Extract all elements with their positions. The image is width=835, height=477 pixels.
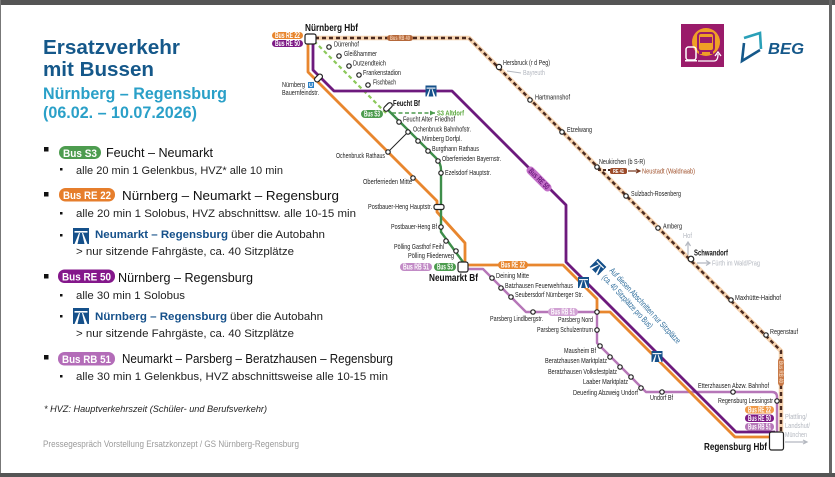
station labels: Postbauer-Heng Bf bbox=[391, 222, 438, 231]
pill: RB 51 Regensburg bbox=[745, 422, 774, 431]
station labels: Ezelsdorf Hauptstr. bbox=[445, 168, 491, 177]
station labels: Undorf Bf bbox=[650, 393, 674, 402]
icon: motorway rotated bbox=[590, 259, 606, 275]
pill: RE 22 Regensburg bbox=[745, 405, 774, 414]
station: Nürnberg Hbf bbox=[305, 23, 359, 44]
pill: RB 51 Neumarkt: Bus RB 51 bbox=[403, 262, 429, 272]
pill: RB 51 Parsberg: Bus RB 51 bbox=[551, 308, 575, 316]
station labels: Maxhütte-Haidhof bbox=[735, 293, 782, 302]
list item: Bus RB 51: alle 30 min 1 Gelenkbus, HVZ abschnittsweise alle 10-15 min bbox=[76, 371, 388, 383]
station labels: Neukirchen (b S-R) bbox=[599, 157, 645, 166]
station labels: Beratzhausen Volksfestplatz bbox=[548, 367, 617, 376]
connections: grey destinations: Fürth im Wald/Prag bbox=[712, 258, 760, 268]
line: RE 22 bbox=[308, 44, 775, 437]
list item: Bus RE 50 bbox=[44, 270, 323, 340]
pill: RB 40 vertical bbox=[777, 358, 784, 386]
line: RB 40 dashed bbox=[315, 38, 781, 436]
icon: U-Bahn: U bbox=[309, 83, 313, 89]
list item: Bus RE 22: Bus RE 22 bbox=[63, 190, 111, 202]
list item: Bus RE 22: über die Autobahn bbox=[231, 229, 325, 241]
station labels: Fischbach bbox=[373, 78, 396, 86]
pill: S3 Feucht bbox=[361, 110, 383, 118]
callout: motorway seating note: (ca. 40 Sitzplätze pro Bus) bbox=[600, 272, 655, 330]
title: Ersatzverkehr bbox=[43, 37, 180, 59]
line: RB 51 bbox=[468, 269, 777, 435]
station labels: Oberferrieden Mitte bbox=[363, 177, 412, 186]
pill: S3 Feucht: Bus S3 bbox=[364, 110, 380, 118]
list item: Bus S3 bbox=[44, 146, 283, 177]
icon: bus replacement bbox=[681, 24, 724, 67]
station labels: Amberg bbox=[663, 222, 682, 230]
pill: RE 22 Regensburg: Bus RE 22 bbox=[748, 405, 771, 414]
pill: RB 51 Parsberg bbox=[548, 308, 578, 316]
station labels: Pölling Gasthof Feihl bbox=[394, 242, 444, 251]
list item: Bus RE 22 bbox=[44, 188, 356, 258]
stations: nodes bbox=[314, 45, 779, 403]
icon: motorway bbox=[73, 228, 89, 244]
station labels: Parsberg Nord bbox=[558, 315, 593, 324]
station labels: Dürrenhof bbox=[334, 40, 360, 48]
station labels: Feucht Alter Friedhof bbox=[403, 114, 456, 124]
connection: S3 Altdorf bbox=[430, 110, 465, 118]
pill: RB 51 Regensburg: Bus RB 51 bbox=[748, 422, 771, 431]
icon: motorway Undorf bbox=[652, 351, 662, 362]
pill: RE 22 east of Neumarkt bbox=[498, 260, 528, 270]
route map bbox=[272, 23, 811, 453]
pill: RE 50 Nürnberg: Bus RE 50 bbox=[275, 39, 300, 48]
station: Feucht Bf: Feucht Bf bbox=[393, 99, 420, 108]
station: Neumarkt Bf bbox=[429, 262, 478, 284]
station labels: Ochenbruck Bahnhofstr. bbox=[413, 124, 471, 134]
title bbox=[43, 37, 227, 122]
connections: grey destinations: Plattling/ bbox=[785, 412, 808, 421]
station: Regensburg Hbf: Regensburg Hbf bbox=[704, 441, 767, 453]
station labels: Gleißhammer bbox=[344, 49, 377, 58]
logo: BEG bbox=[742, 33, 804, 61]
station labels: Hartmannshof bbox=[535, 92, 571, 102]
pill: RB 40 top bbox=[387, 35, 413, 42]
station labels: Ochenbruck Rathaus bbox=[336, 151, 385, 160]
connections: grey destinations: Landshut/ bbox=[785, 421, 811, 430]
line: S3 bbox=[388, 110, 463, 262]
station labels: Regensburg Lessingstr bbox=[718, 396, 773, 405]
pill: RE 50 Regensburg bbox=[745, 414, 774, 423]
title: Nürnberg – Regensburg bbox=[43, 85, 227, 103]
connector: Ochenbruck bbox=[388, 132, 408, 152]
station labels: Sulzbach-Rosenberg bbox=[631, 189, 681, 198]
station: Regensburg Hbf bbox=[704, 432, 784, 453]
station: Schwandorf: Schwandorf bbox=[694, 248, 728, 258]
pill: RE 22 Nürnberg bbox=[272, 31, 303, 40]
line: RE 50 bbox=[313, 44, 775, 432]
pill: RB 40 vertical: Bus RB 40 bbox=[777, 361, 783, 383]
list item: Bus RB 51: Neumarkt – Parsberg – Beratzhausen – Regensburg bbox=[122, 352, 393, 366]
connection: S3 Altdorf: S3 Altdorf bbox=[437, 110, 465, 118]
list item: Bus RE 22: alle 20 min 1 Solobus, HVZ abschnittsw. alle 10-15 min bbox=[76, 208, 356, 220]
station: Neumarkt Bf: Neumarkt Bf bbox=[429, 272, 478, 284]
list item: Bus S3: alle 20 min 1 Gelenkbus, HVZ* alle 10 min bbox=[76, 165, 283, 177]
connections: grey destinations bbox=[507, 68, 811, 444]
icon: motorway north bbox=[426, 86, 436, 96]
station labels: Pölling Fliederweg bbox=[408, 251, 454, 260]
station labels: Mausheim Bf bbox=[564, 346, 597, 355]
station: Nürnberg Hbf: Nürnberg Hbf bbox=[305, 23, 359, 34]
station labels: Etzelwang bbox=[567, 125, 592, 134]
title: (06.02. – 10.07.2026) bbox=[43, 104, 197, 122]
footnote: * HVZ: Hauptverkehrszeit (Schüler- und Berufsverkehr) bbox=[44, 404, 267, 415]
connections: grey destinations: Bayreuth bbox=[523, 68, 545, 77]
station labels: Etterzhausen Abzw. Bahnhof bbox=[698, 381, 770, 390]
connection: RE 41 Neustadt: Neustadt (Waldnaab) bbox=[642, 166, 695, 176]
station labels: Parsberg Schulzentrum bbox=[537, 325, 593, 334]
pill: RB 51 Neumarkt bbox=[400, 262, 432, 272]
list item: Bus RE 50: alle 30 min 1 Solobus bbox=[76, 290, 186, 302]
station labels: Mimberg Dorfpl. bbox=[422, 134, 462, 143]
pill: RE 22 east of Neumarkt: Bus RE 22 bbox=[501, 260, 525, 270]
pill: RE 22 Nürnberg: Bus RE 22 bbox=[275, 31, 300, 40]
panel: line list bbox=[44, 146, 393, 383]
connection: RE 41 Neustadt: RE 41 bbox=[613, 169, 624, 175]
station labels: Hersbruck (r d Peg) bbox=[503, 58, 550, 67]
list item: Bus RB 51: Bus RB 51 bbox=[62, 354, 111, 366]
station labels: Batzhausen Feuerwehrhaus bbox=[505, 281, 573, 290]
station labels: Burgthann Rathaus bbox=[432, 144, 479, 153]
title: mit Bussen bbox=[43, 59, 154, 81]
station labels: Laaber Marktplatz bbox=[583, 377, 628, 386]
list item: Bus RE 50: über die Autobahn bbox=[230, 311, 323, 323]
list item: Bus RE 50: Bus RE 50 bbox=[62, 272, 111, 284]
line: S3 dashed north bbox=[314, 41, 386, 113]
connections: grey destinations: Hof bbox=[683, 231, 693, 240]
callout: motorway seating note: Auf diesen Abschnitten nur Sitzplätze bbox=[608, 266, 683, 346]
pill: RE 50 Regensburg: Bus RE 50 bbox=[748, 414, 771, 423]
station labels: Deining Mitte bbox=[496, 271, 529, 280]
station labels: Bauernfeindstr. bbox=[282, 88, 319, 97]
list item: Bus RE 22: Nürnberg – Neumarkt – Regensburg bbox=[122, 189, 339, 203]
station labels: Seubersdorf Nürnberger Str. bbox=[515, 290, 583, 299]
station labels bbox=[282, 40, 799, 405]
station labels: Dutzendteich bbox=[353, 58, 386, 68]
icon: motorway bbox=[73, 308, 89, 324]
list item: Bus S3: Bus S3 bbox=[63, 148, 97, 160]
icon: U-Bahn bbox=[308, 82, 314, 89]
footer: Pressegespräch Vorstellung Ersatzkonzept / GS Nürnberg-Regensburg bbox=[43, 439, 299, 449]
list item: Bus RB 51 bbox=[44, 352, 393, 383]
station labels: Nürnberg bbox=[282, 80, 305, 89]
station labels: Oberferrieden Bayernstr. bbox=[442, 154, 501, 163]
list item: Bus S3: Feucht – Neumarkt bbox=[106, 146, 214, 160]
station labels: Regenstauf bbox=[770, 327, 799, 336]
list item: Bus RE 22: Neumarkt – Regensburg bbox=[95, 229, 228, 241]
list item: Bus RE 50: Nürnberg – Regensburg bbox=[95, 311, 227, 323]
connections: grey destinations: München bbox=[785, 430, 807, 439]
pill: RE 50 diagonal bbox=[525, 165, 553, 193]
icon: motorway Neumarkt bbox=[578, 277, 589, 288]
list item: Bus RE 22: > nur sitzende Fahrgäste, ca. 40 Sitzplätze bbox=[76, 246, 294, 258]
list item: Bus RE 50: Nürnberg – Regensburg bbox=[118, 271, 253, 285]
station labels: Postbauer-Heng Hauptstr. bbox=[368, 202, 432, 211]
pill: S3 Neumarkt: Bus S3 bbox=[437, 262, 453, 272]
station labels: Deuerling Abzweig Undorf bbox=[573, 388, 639, 397]
station labels: Beratzhausen Marktplatz bbox=[545, 356, 607, 365]
pill: S3 Neumarkt bbox=[434, 262, 456, 272]
line: S3 to Altdorf bbox=[392, 112, 436, 114]
logo: BEG: BEG bbox=[768, 41, 804, 58]
line: RE 41 branch bbox=[598, 169, 610, 171]
pill: RE 50 Nürnberg bbox=[272, 39, 303, 48]
list item: Bus RE 50: > nur sitzende Fahrgäste, ca. 40 Sitzplätze bbox=[76, 328, 294, 340]
pills on the map bbox=[272, 31, 784, 431]
station labels: Parsberg Lindlbergstr. bbox=[490, 314, 543, 323]
station labels: Frankenstadion bbox=[363, 68, 401, 77]
pill: RB 40 top: Bus RB 40 bbox=[390, 35, 410, 42]
pill: RE 50 diagonal: Bus RE 50 bbox=[527, 167, 552, 192]
connection: RE 41 Neustadt bbox=[610, 166, 695, 176]
